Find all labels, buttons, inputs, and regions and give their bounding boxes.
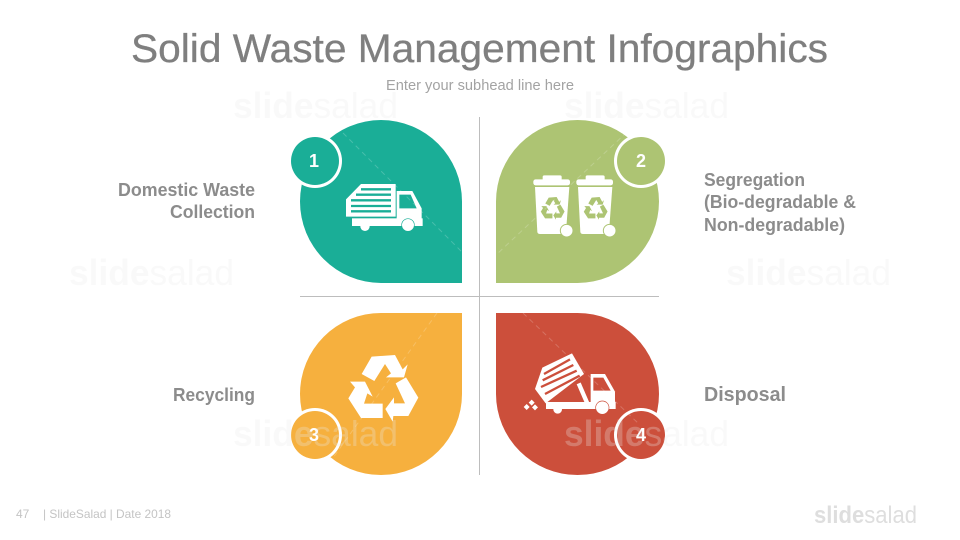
title: Solid Waste Management Infographics xyxy=(131,27,828,71)
watermark overlay: slidesalad xyxy=(564,413,729,454)
icon: two recycling bins xyxy=(533,175,616,237)
icon: recycling arrows xyxy=(348,355,418,422)
label 1: Domestic Waste xyxy=(118,180,255,200)
teardrop shape 2 xyxy=(496,120,659,283)
subhead: Enter your subhead line here xyxy=(386,78,574,94)
label 2: Segregation xyxy=(704,170,805,190)
footer text: | SlideSalad | Date 2018 xyxy=(43,507,171,521)
badge 4: 4 xyxy=(636,425,646,445)
footer page number: 47 xyxy=(16,507,30,521)
badge 2 xyxy=(614,134,668,188)
panel: step 2 segregation xyxy=(496,120,856,283)
badge 1 xyxy=(288,134,342,188)
horizontal divider xyxy=(300,296,659,298)
badge 1: 1 xyxy=(309,151,319,171)
footer logo: slidesalad xyxy=(814,502,917,529)
watermark overlay: slidesalad xyxy=(233,85,398,126)
badge 4 xyxy=(614,408,668,462)
label 1: Collection xyxy=(170,202,255,222)
badge 3 xyxy=(288,408,342,462)
teardrop shape 4 xyxy=(496,313,659,475)
watermark overlay xyxy=(69,85,891,454)
label 2: (Bio-degradable & xyxy=(704,192,856,212)
label 4: Disposal xyxy=(704,384,786,406)
panel: step 4 disposal xyxy=(496,313,786,475)
icon: dump truck xyxy=(524,353,616,414)
watermark overlay: slidesalad xyxy=(233,413,398,454)
teardrop shape 3 xyxy=(300,313,462,475)
watermark overlay: slidesalad xyxy=(564,85,729,126)
icon: garbage truck xyxy=(346,184,423,231)
teardrop shape 1 xyxy=(300,120,462,283)
watermark overlay: slidesalad xyxy=(69,252,234,293)
panel: step 3 recycling xyxy=(173,313,462,475)
badge 3: 3 xyxy=(309,425,319,445)
panel: step 1 domestic waste collection xyxy=(118,120,462,283)
label 2: Non-degradable) xyxy=(704,215,845,235)
badge 2: 2 xyxy=(636,151,646,171)
label 1 xyxy=(118,180,255,222)
label 2 xyxy=(704,170,856,235)
label 3: Recycling xyxy=(173,385,255,405)
watermark overlay: slidesalad xyxy=(726,252,891,293)
vertical divider xyxy=(478,117,480,475)
